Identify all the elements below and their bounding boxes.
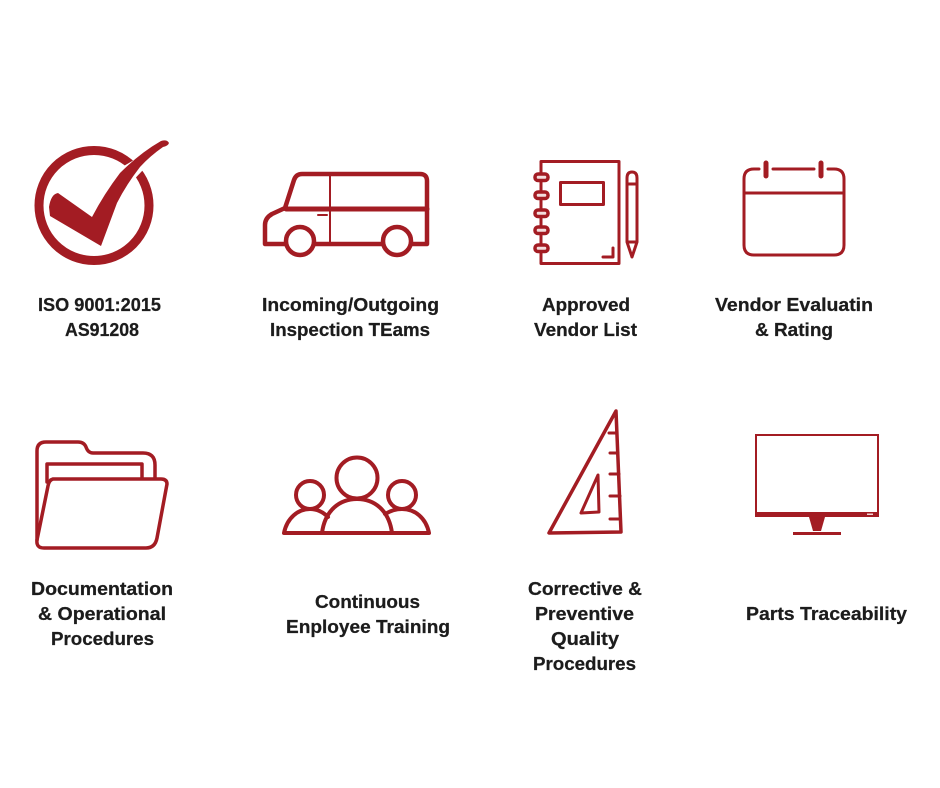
icon: folder xyxy=(37,442,167,548)
label: approved vendor list: Vendor List xyxy=(534,320,637,340)
label: documentation xyxy=(31,579,173,649)
icon: computer monitor xyxy=(755,435,879,535)
label: vendor evaluation xyxy=(715,295,873,340)
label: inspection teams xyxy=(262,295,439,340)
icon: check mark in circle xyxy=(39,140,169,260)
label: approved vendor list: Approved xyxy=(542,295,630,315)
label: employee training: Enployee Training xyxy=(286,617,450,637)
label: parts traceability: Parts Traceability xyxy=(746,604,907,624)
label: employee training: Continuous xyxy=(315,592,420,612)
label: documentation: Documentation xyxy=(31,579,173,599)
label: vendor evaluation: Vendor Evaluatin xyxy=(715,295,873,315)
label: corrective procedures: Procedures xyxy=(533,654,636,674)
label: corrective procedures xyxy=(528,579,642,674)
icon: notebook and pencil xyxy=(535,162,637,264)
icon: set square xyxy=(549,411,621,533)
label: corrective procedures: Corrective & xyxy=(528,579,642,599)
label: corrective procedures: Preventive xyxy=(535,604,634,624)
label: approved vendor list xyxy=(534,295,637,340)
label: ISO: AS91208 xyxy=(65,320,139,340)
label: corrective procedures: Quality xyxy=(551,629,619,649)
icon: calendar xyxy=(744,163,844,255)
label: ISO xyxy=(38,295,161,340)
label: inspection teams: Inspection TEams xyxy=(270,320,430,340)
label: inspection teams: Incoming/Outgoing xyxy=(262,295,439,315)
label: employee training xyxy=(286,592,450,637)
label: ISO: ISO 9001:2015 xyxy=(38,295,161,315)
label: documentation: Procedures xyxy=(51,629,154,649)
label: vendor evaluation: & Rating xyxy=(755,320,833,340)
label: documentation: & Operational xyxy=(38,604,166,624)
icon: van xyxy=(265,174,427,255)
icon: group of people xyxy=(284,458,429,533)
